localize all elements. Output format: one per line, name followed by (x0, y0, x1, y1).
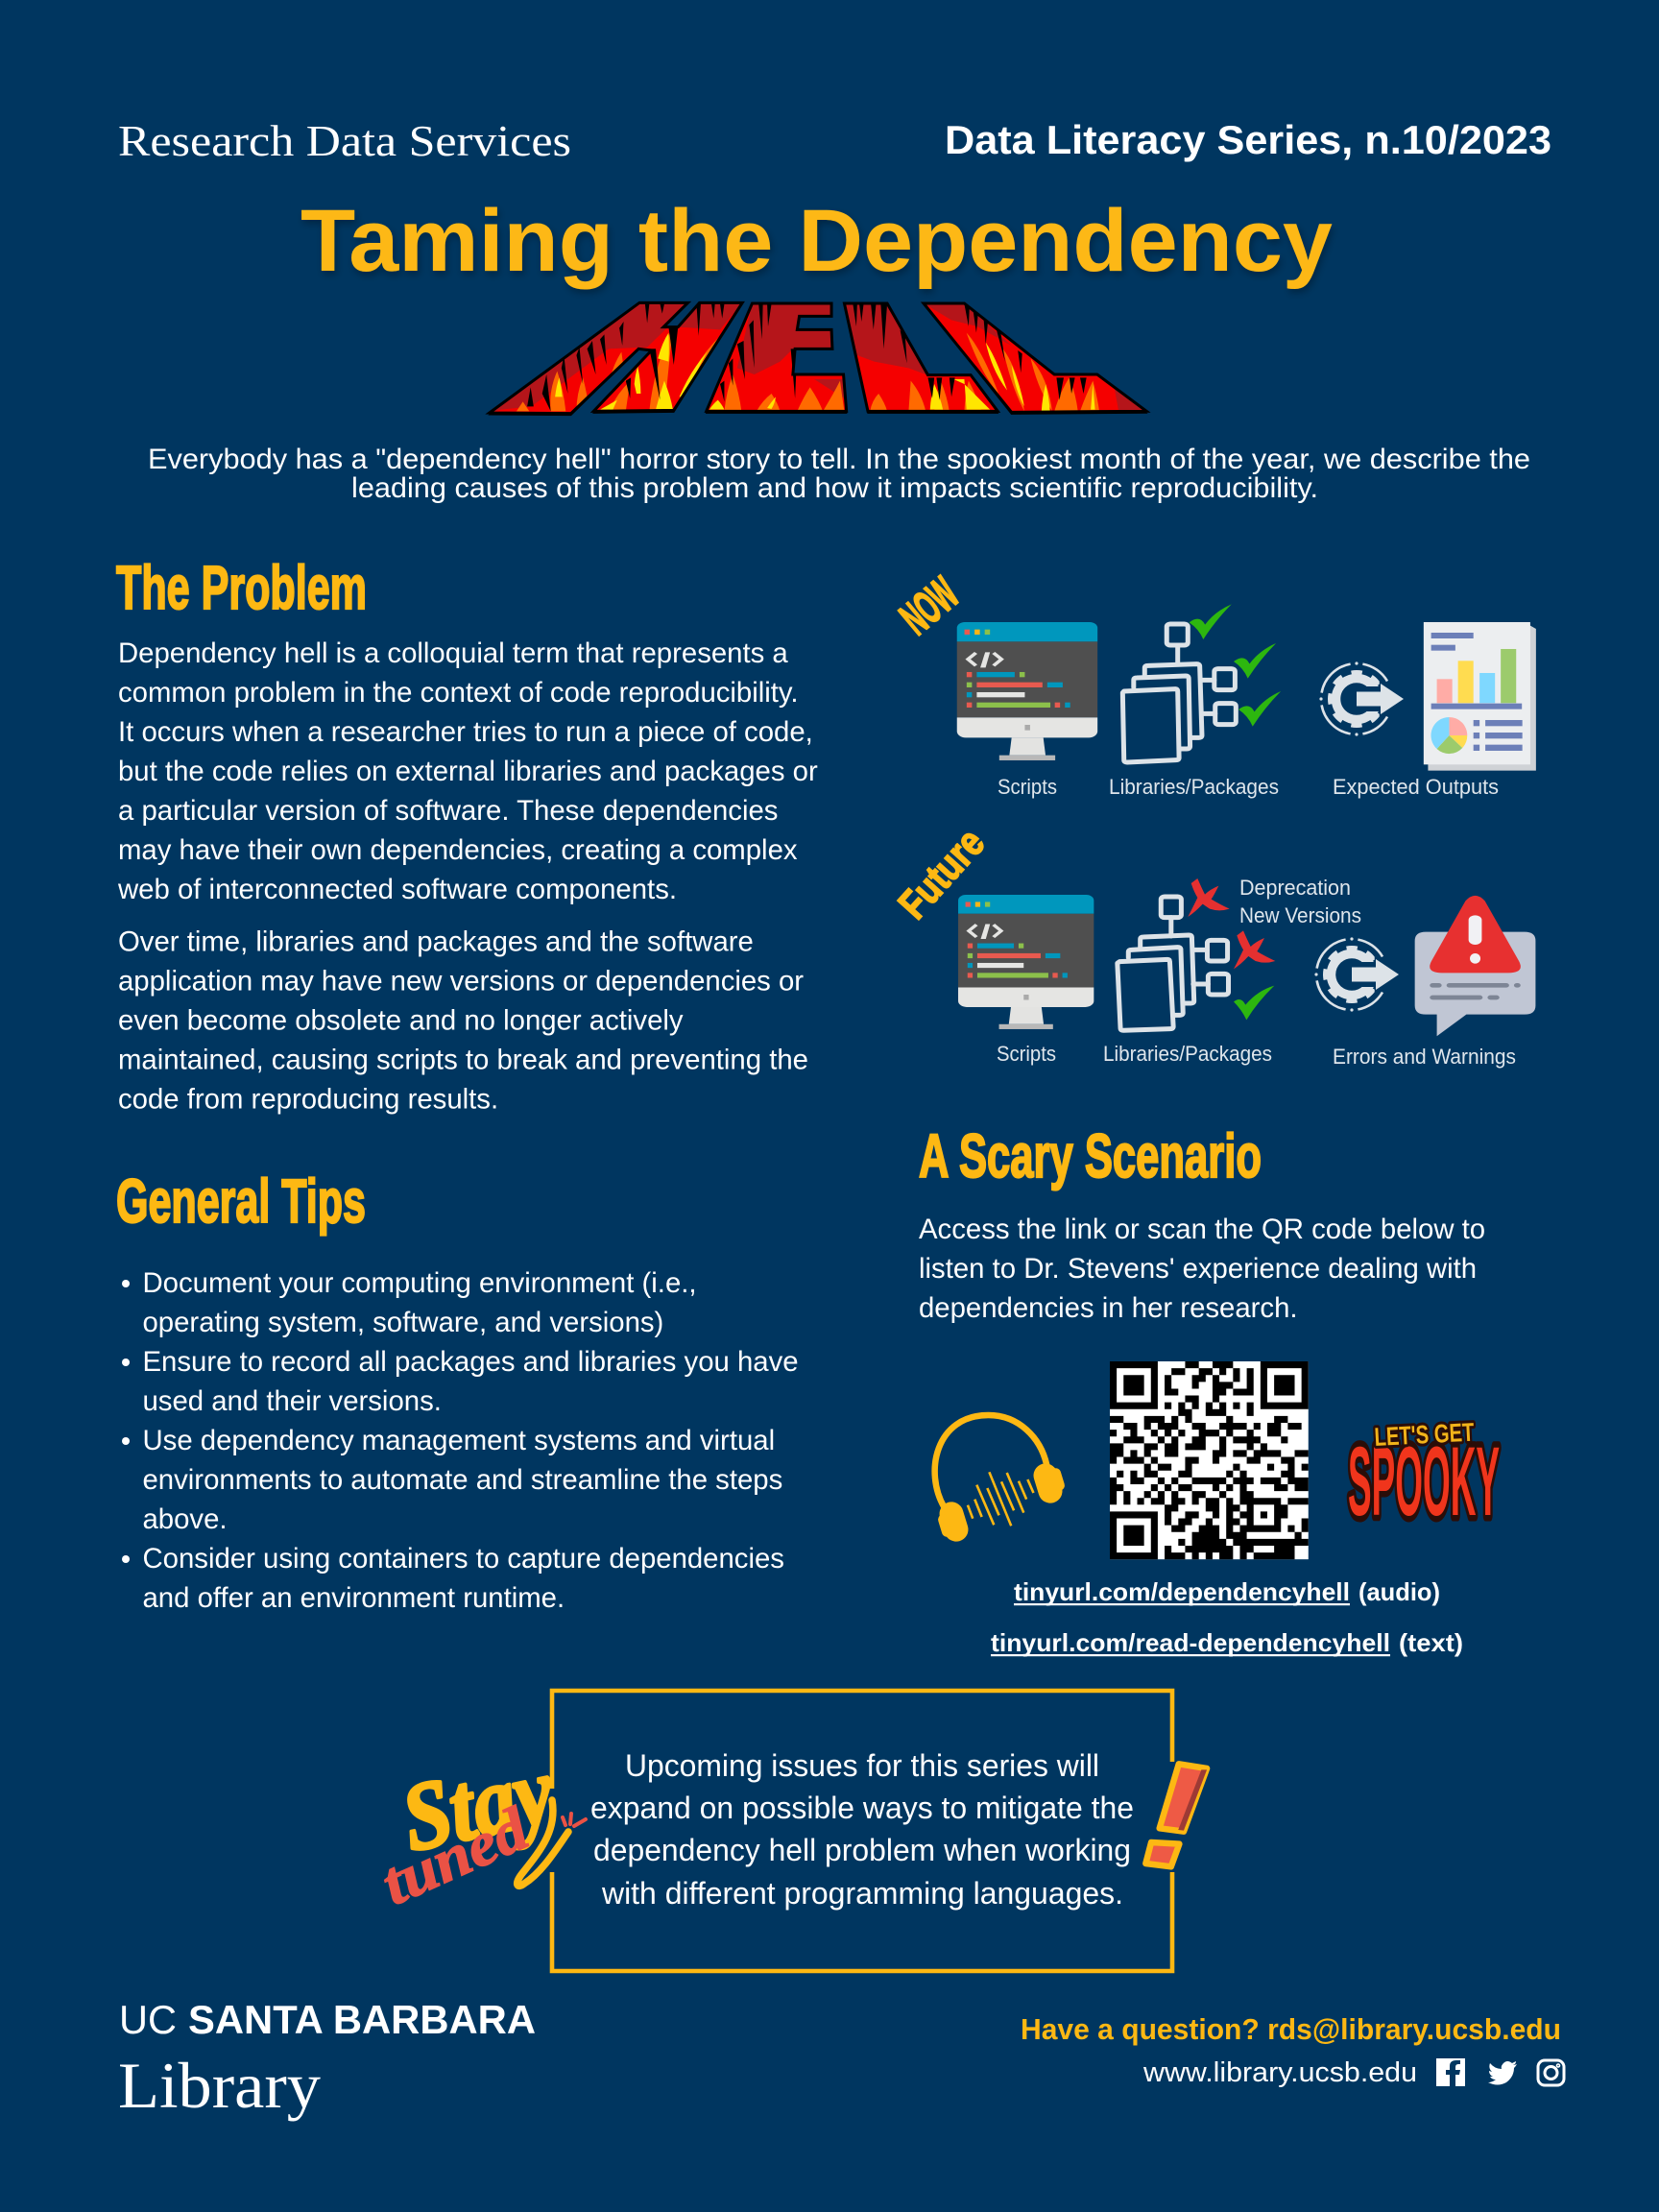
logo: uc santa barbara library: SANTA BARBARA (188, 1997, 536, 2042)
lettering: stay tuned: Stay (393, 1736, 563, 1872)
callout text: dependency hell problem when working (593, 1833, 1131, 1867)
sticker: let's get spooky: LET'S GET (1374, 1418, 1476, 1452)
header: series label: Data Literacy Series, n.10/2023 (945, 117, 1551, 162)
panel: now workflow (957, 604, 1536, 799)
label: future: Future (890, 820, 994, 927)
icon: gear arrow (1319, 661, 1404, 736)
text block: problem description: code from reproducing results. (118, 1083, 498, 1116)
captions: deprecation and new versions: Deprecation (1239, 876, 1351, 900)
list: general tips: Document your computing environment (i.e., (142, 1267, 697, 1299)
links: audio and text: (audio) (1358, 1577, 1440, 1606)
text block: problem description (117, 637, 818, 1116)
text block: problem description: It occurs when a researcher tries to run a piece of code, (118, 716, 813, 748)
contact: email: Have a question? rds@library.ucsb.edu (1021, 2012, 1561, 2046)
icon: instagram (1538, 2060, 1564, 2085)
links: audio and text: (text) (1399, 1628, 1463, 1657)
captions: future workflow: Libraries/Packages (1103, 1042, 1272, 1066)
captions: now workflow: Expected Outputs (1333, 775, 1499, 799)
callout text: with different programming languages. (601, 1876, 1123, 1911)
icon: headphones (935, 1415, 1066, 1545)
icon: warning speech bubble (1415, 896, 1535, 1036)
icon: gear arrow (1314, 937, 1399, 1012)
captions: now workflow: Scripts (998, 775, 1057, 799)
links: audio and text: tinyurl.com/read-dependencyhell (991, 1628, 1390, 1657)
text block: problem description: but the code relies on external libraries and packages or (118, 756, 818, 787)
captions: future workflow (997, 1042, 1516, 1069)
text block: scenario description: Access the link or scan the QR code below to (919, 1214, 1485, 1245)
icon: libraries and packages with checks (1122, 604, 1281, 762)
contact: website: www.library.ucsb.edu (1142, 2057, 1417, 2088)
icon: exclamation mark (1145, 1764, 1207, 1866)
logo: uc santa barbara library: Library (118, 2049, 321, 2122)
heading: a scary scenario: A Scary Scenario (919, 1121, 1262, 1190)
text block: problem description: maintained, causing scripts to break and preventing the (118, 1045, 808, 1075)
lettering: stay tuned (372, 1736, 586, 1918)
heading: general tips: General Tips (116, 1166, 366, 1236)
title: flaming HELL lettering (480, 301, 1166, 416)
list: general tips (122, 1267, 799, 1614)
text block: problem description: Over time, libraries and packages and the software (118, 926, 754, 958)
list: general tips: Ensure to record all packages and libraries you have (142, 1346, 799, 1378)
heading: the problem: The Problem (116, 553, 367, 622)
captions: deprecation and new versions: New Versions (1239, 903, 1361, 927)
icon: facebook (1436, 2058, 1465, 2086)
captions: future workflow: Scripts (997, 1042, 1056, 1066)
text block: problem description: web of interconnected software components. (117, 874, 677, 905)
list: general tips: operating system, software, and versions) (142, 1307, 663, 1338)
icon: scripts monitor (958, 895, 1094, 1029)
panel: future workflow (958, 876, 1535, 1069)
callout text: expand on possible ways to mitigate the (590, 1791, 1134, 1825)
list: general tips: above. (142, 1503, 228, 1535)
icon: report outputs (1424, 622, 1536, 771)
text block: problem description: a particular version of software. These dependencies (118, 795, 778, 827)
callout text: Upcoming issues for this series will (625, 1748, 1099, 1783)
captions: future workflow: Errors and Warnings (1333, 1045, 1516, 1069)
text block: scenario description: listen to Dr. Stevens' experience dealing with (919, 1253, 1477, 1285)
intro paragraph: leading causes of this problem and how it impacts scientific reproducibility. (351, 472, 1318, 504)
text block: problem description: may have their own dependencies, creating a complex (118, 834, 798, 866)
list: general tips: environments to automate and streamline the steps (142, 1464, 782, 1496)
list: general tips: used and their versions. (142, 1385, 442, 1417)
icon: scripts monitor (957, 622, 1097, 760)
text block: problem description: common problem in the context of code reproducibility. (118, 677, 799, 709)
lettering: stay tuned: tuned (372, 1793, 539, 1918)
callout: stay tuned box (552, 1691, 1172, 1971)
logo: uc santa barbara library: UC (119, 1997, 177, 2042)
captions: now workflow: Libraries/Packages (1109, 775, 1279, 799)
intro paragraph: Everybody has a "dependency hell" horror story to tell. In the spookiest month of the year, we describe the (148, 444, 1530, 475)
text block: problem description: Dependency hell is a colloquial term that represents a (118, 637, 788, 669)
list: general tips: and offer an environment runtime. (142, 1582, 565, 1614)
captions: now workflow (998, 775, 1499, 799)
list: general tips: Consider using containers to capture dependencies (142, 1543, 784, 1575)
text block: scenario description (919, 1214, 1485, 1324)
text block: scenario description: dependencies in her research. (919, 1292, 1298, 1324)
icon: twitter (1488, 2061, 1517, 2085)
header: research data services: Research Data Services (118, 116, 571, 165)
text block: problem description: application may have new versions or dependencies or (118, 966, 804, 997)
intro paragraph (148, 444, 1530, 504)
title: Taming the Dependency (301, 192, 1333, 290)
callout text (590, 1748, 1134, 1911)
captions: deprecation and new versions (1239, 876, 1361, 927)
sticker: let's get spooky (1348, 1418, 1500, 1536)
QR code (1110, 1361, 1309, 1559)
icon: libraries and packages (1118, 897, 1228, 1030)
icon: failure crosses and check (1188, 878, 1275, 1020)
logo: uc santa barbara library (118, 1997, 536, 2122)
links: audio and text: tinyurl.com/dependencyhell (1014, 1577, 1350, 1606)
links: audio and text (991, 1577, 1463, 1657)
text block: problem description: even become obsolete and no longer actively (118, 1004, 684, 1037)
list: general tips: Use dependency management systems and virtual (142, 1425, 775, 1456)
label: now: NOW (891, 567, 969, 644)
